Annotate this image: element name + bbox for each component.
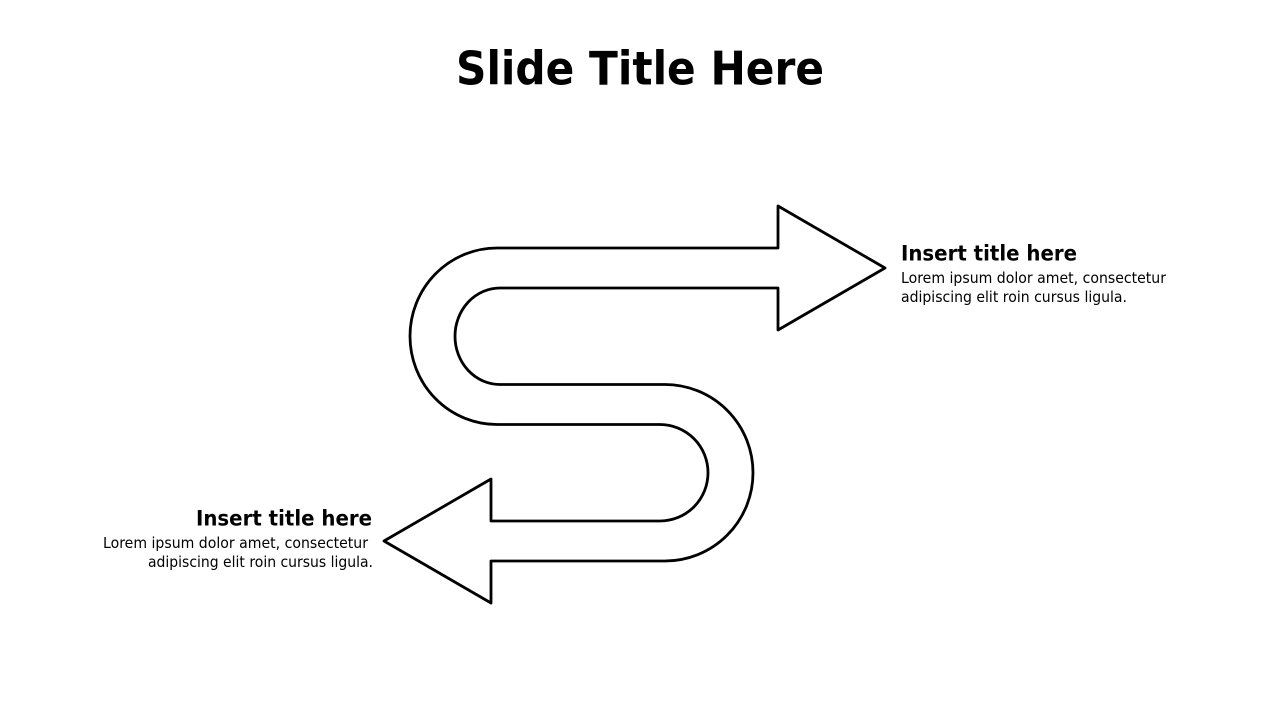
text block: upper right [901,242,1167,306]
body text: upper right: Lorem ipsum dolor amet, consectetur [901,269,1167,287]
body text: lower left [103,534,373,571]
body text: upper right [901,269,1167,306]
arrow: S-shaped double-headed arrow [384,206,885,603]
body text: upper right: adipiscing elit roin cursus ligula. [901,288,1127,306]
body text: lower left: Lorem ipsum dolor amet, consectetur [103,534,369,552]
title: Slide Title Here [456,42,824,96]
text block: lower left [103,506,373,571]
body text: lower left: adipiscing elit roin cursus ligula. [148,553,373,571]
heading: upper right: Insert title here [901,242,1077,266]
heading: lower left: Insert title here [196,506,372,530]
